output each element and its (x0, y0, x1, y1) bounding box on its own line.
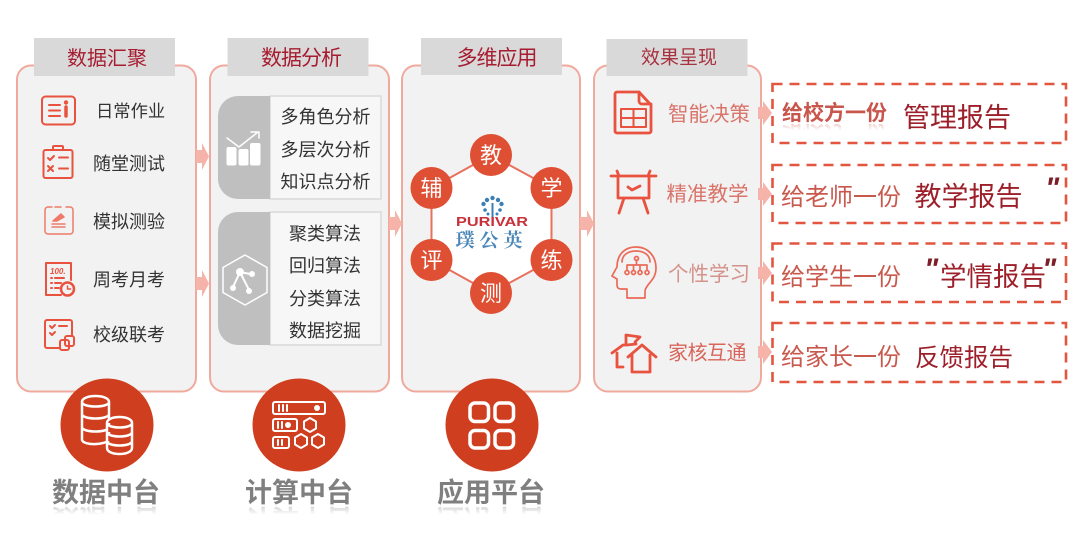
text: algorithm list: 回归算法 (289, 256, 361, 276)
node: test: 测 (480, 281, 502, 306)
icon: teaching board (611, 171, 656, 213)
icon: network hexagon (223, 255, 267, 305)
quote mark: " (1045, 172, 1060, 205)
node: learn: 学 (540, 176, 563, 201)
report box: parent (772, 323, 1066, 382)
text: algorithm list: 分类算法 (289, 289, 361, 309)
icon: class test (44, 146, 72, 178)
icon: bar chart trend (226, 132, 260, 166)
icon: weekly monthly exam (46, 263, 74, 296)
arrows between panels (196, 101, 772, 364)
heading: data analysis (228, 38, 368, 76)
label: 计算中台 (245, 503, 353, 534)
text: teaching report: 教学报告 (914, 182, 1022, 212)
logo: Purivar: PURIVAR (456, 215, 528, 229)
heading: results: 效果呈现 (641, 46, 717, 68)
report box: student: 给学生一份 (781, 264, 901, 291)
text: precise teaching: 精准教学 (666, 183, 748, 206)
panel: data collection (17, 38, 196, 392)
node: teach: 教 (480, 143, 502, 168)
icon: report sheet (615, 92, 651, 133)
label (437, 477, 545, 534)
panel: results (594, 39, 761, 392)
report box: teacher (772, 165, 1066, 223)
hexagon cycle (410, 134, 572, 314)
label: 数据中台 (52, 477, 160, 508)
platform: data middle platform (52, 378, 160, 534)
node: teach (470, 134, 512, 176)
text: algorithm list: 聚类算法 (289, 224, 361, 244)
icon: head (612, 247, 656, 298)
panel: multi-dimensional application (402, 38, 580, 392)
icon: mock exam (45, 207, 73, 234)
heading: data collection (34, 38, 175, 76)
text: analysis list: 多角色分析 (280, 107, 370, 127)
closing quote mark: " (1042, 253, 1057, 286)
node: tutor: 辅 (420, 176, 443, 201)
label: 计算中台 (245, 477, 353, 508)
node: learn (530, 167, 572, 209)
label (245, 477, 353, 534)
node: test (470, 272, 512, 314)
text: weekly monthly exam: 周考月考 (93, 270, 165, 290)
platform: compute middle platform (245, 378, 353, 534)
node: practice (530, 239, 572, 281)
text: class test: 随堂测试 (93, 154, 165, 174)
text: analysis list: 多层次分析 (280, 140, 370, 160)
label (52, 477, 160, 534)
text: personalized learning: 个性学习 (668, 263, 750, 286)
text: home-school communication: 家核互通 (668, 342, 746, 364)
panel: data analysis (210, 38, 389, 392)
report box: school (772, 84, 1066, 145)
text: learning report: 学情报告 (940, 262, 1046, 292)
heading: data analysis: 数据分析 (261, 47, 342, 70)
node: evaluate (410, 239, 452, 281)
card: role analysis (218, 96, 381, 199)
node: tutor (410, 167, 452, 209)
label: 应用平台 (437, 503, 545, 534)
text: daily homework: 日常作业 (96, 101, 165, 121)
report box: parent: 给家长一份 (781, 344, 901, 371)
card: algorithms (218, 212, 381, 345)
icon: daily homework (42, 96, 75, 124)
text: analysis list: 知识点分析 (280, 172, 370, 192)
icon: databases (82, 396, 132, 454)
label: 应用平台 (437, 477, 545, 508)
report box: teacher: 给老师一份 (781, 184, 901, 211)
label: 数据中台 (52, 503, 160, 534)
opening quote mark: " (924, 253, 939, 286)
icon: home school (612, 335, 656, 372)
text: mock exam: 模拟测验 (93, 212, 165, 232)
node: practice: 练 (540, 248, 563, 273)
icon: four squares (470, 403, 514, 448)
logo: Purivar (455, 196, 528, 252)
text: feedback report: 反馈报告 (915, 344, 1013, 372)
node: evaluate: 评 (420, 248, 443, 273)
icon: joint school exam (45, 320, 74, 350)
logo: Purivar: 璞公英 (455, 228, 528, 252)
report box: school: 给校方一份 (782, 101, 887, 125)
icon: weekly monthly exam: 100. (50, 267, 66, 276)
heading: application: 多维应用 (456, 47, 536, 70)
text: analysis list (280, 107, 370, 192)
text: algorithm list (289, 224, 361, 341)
heading: results (606, 39, 748, 76)
heading: data collection: 数据汇聚 (67, 47, 147, 70)
report box: student (772, 244, 1066, 302)
report box: school: 给校方一份 (782, 121, 887, 145)
icon: servers (273, 402, 325, 448)
text: algorithm list: 数据挖掘 (289, 321, 361, 341)
text: smart decisions: 智能决策 (668, 103, 750, 126)
text: management report: 管理报告 (903, 103, 1011, 133)
heading: application (421, 38, 562, 75)
platform: application platform (437, 378, 545, 534)
text: joint school exam: 校级联考 (93, 325, 165, 345)
